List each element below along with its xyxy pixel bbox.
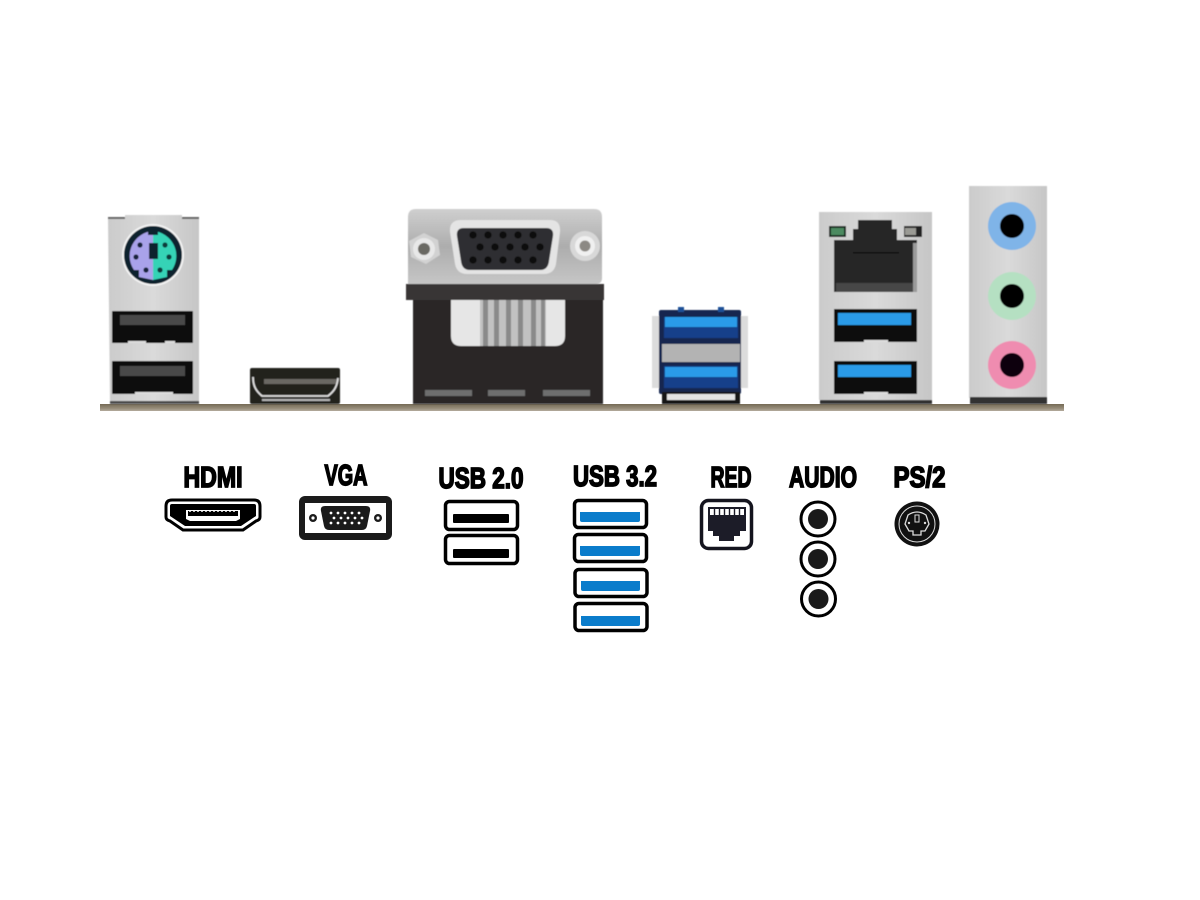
VGA black body — [413, 298, 603, 404]
pink jack — [988, 341, 1036, 389]
VGA metal tab — [451, 300, 565, 346]
RJ45 jack — [834, 220, 917, 292]
icon: audio jacks — [801, 502, 836, 616]
VGA left screw — [409, 233, 440, 264]
label: RED: RED — [710, 462, 752, 494]
amber LED — [904, 226, 922, 237]
green jack — [988, 272, 1036, 320]
HDMI port photo — [250, 368, 340, 404]
icon: RJ45 network — [702, 500, 752, 548]
label: PS/2: PS/2 — [894, 462, 946, 494]
green LED — [829, 226, 846, 237]
label: HDMI: HDMI — [184, 462, 242, 494]
icon: HDMI — [166, 500, 260, 530]
lower USB 3.2 port — [834, 361, 917, 394]
PS/2 port photo — [122, 224, 184, 286]
icon: PS/2 — [894, 502, 940, 546]
icon: USB 3.2 — [574, 500, 647, 630]
VGA metal plate — [408, 209, 602, 284]
panel: RJ45 and USB 3.2 stack — [819, 212, 932, 404]
lower blue tongue — [664, 366, 738, 388]
icon: VGA — [299, 496, 392, 540]
USB 2.0 upper port photo — [112, 311, 193, 343]
VGA D-shell with pins — [450, 220, 560, 274]
upper USB 3.2 port — [834, 309, 917, 342]
icon: USB 2.0 — [446, 502, 518, 564]
motherboard edge strip — [100, 404, 1064, 411]
upper blue tongue — [664, 317, 738, 338]
label: VGA: VGA — [324, 460, 368, 492]
USB 2.0 lower port photo — [112, 361, 193, 394]
silver divider — [662, 344, 740, 362]
panel: VGA connector — [406, 209, 604, 404]
VGA right screw — [570, 231, 600, 261]
blue jack — [988, 202, 1036, 250]
label: USB 3.2: USB 3.2 — [573, 461, 657, 493]
panel: PS/2 and USB 2.0 stack — [108, 215, 199, 404]
label: USB 2.0: USB 2.0 — [438, 463, 524, 495]
panel: audio jacks — [969, 186, 1047, 404]
label: AUDIO: AUDIO — [789, 462, 857, 494]
panel: USB 3.2 stacked ports — [652, 307, 748, 404]
